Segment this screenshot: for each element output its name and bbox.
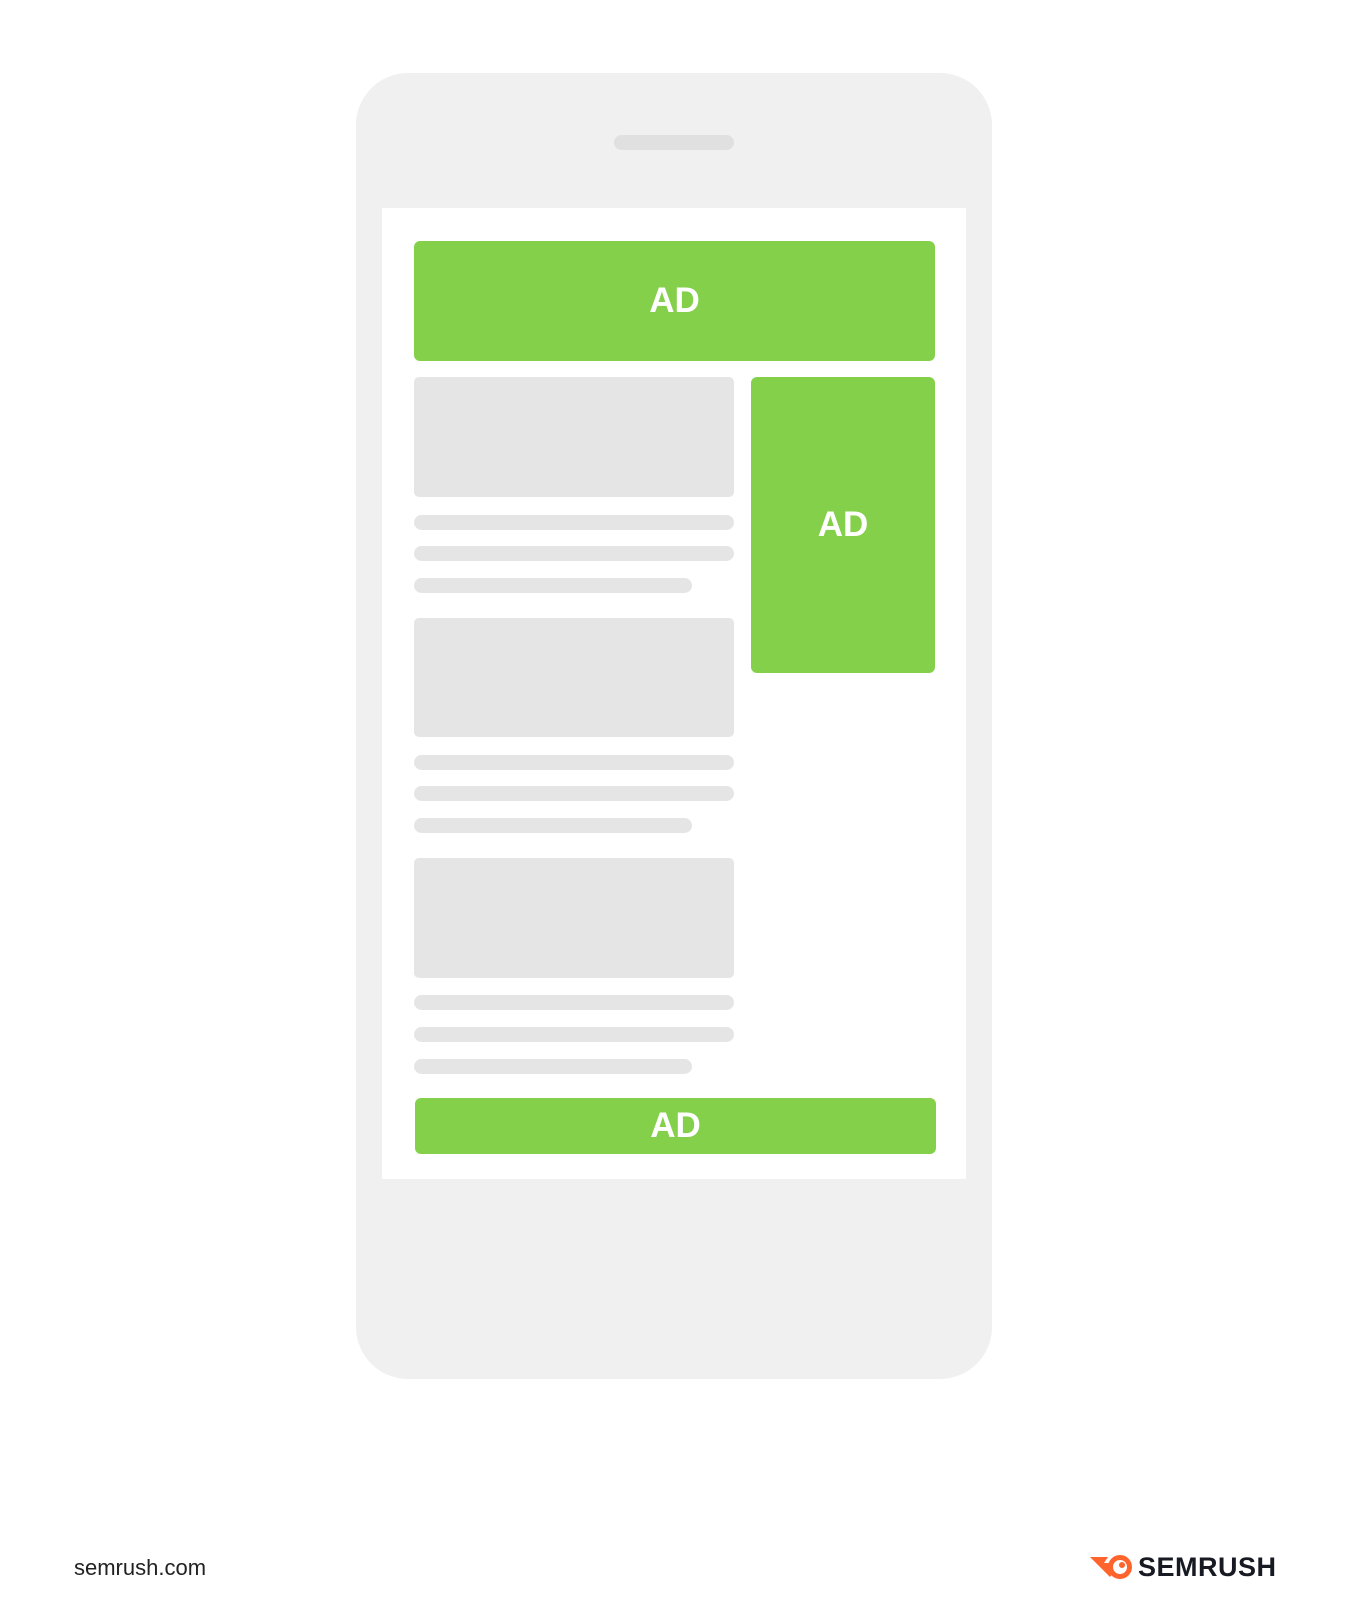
ad: sidebar: AD — [818, 505, 868, 544]
ad: bottom banner: AD — [650, 1106, 701, 1145]
content block 1 — [414, 377, 734, 593]
ad: sidebar — [751, 377, 935, 673]
speaker — [614, 135, 734, 150]
phone — [356, 73, 992, 1379]
footer: semrush.com: semrush.com — [74, 1555, 206, 1580]
logo: semrush: SEMRUSH — [1138, 1552, 1277, 1582]
ad: top banner: AD — [649, 281, 700, 320]
ad: top banner — [414, 241, 935, 361]
ad: bottom banner — [415, 1098, 936, 1154]
icon: fireball — [1090, 1555, 1132, 1579]
content block 2 — [414, 618, 734, 833]
screen — [382, 208, 966, 1179]
content block 3 — [414, 858, 734, 1074]
